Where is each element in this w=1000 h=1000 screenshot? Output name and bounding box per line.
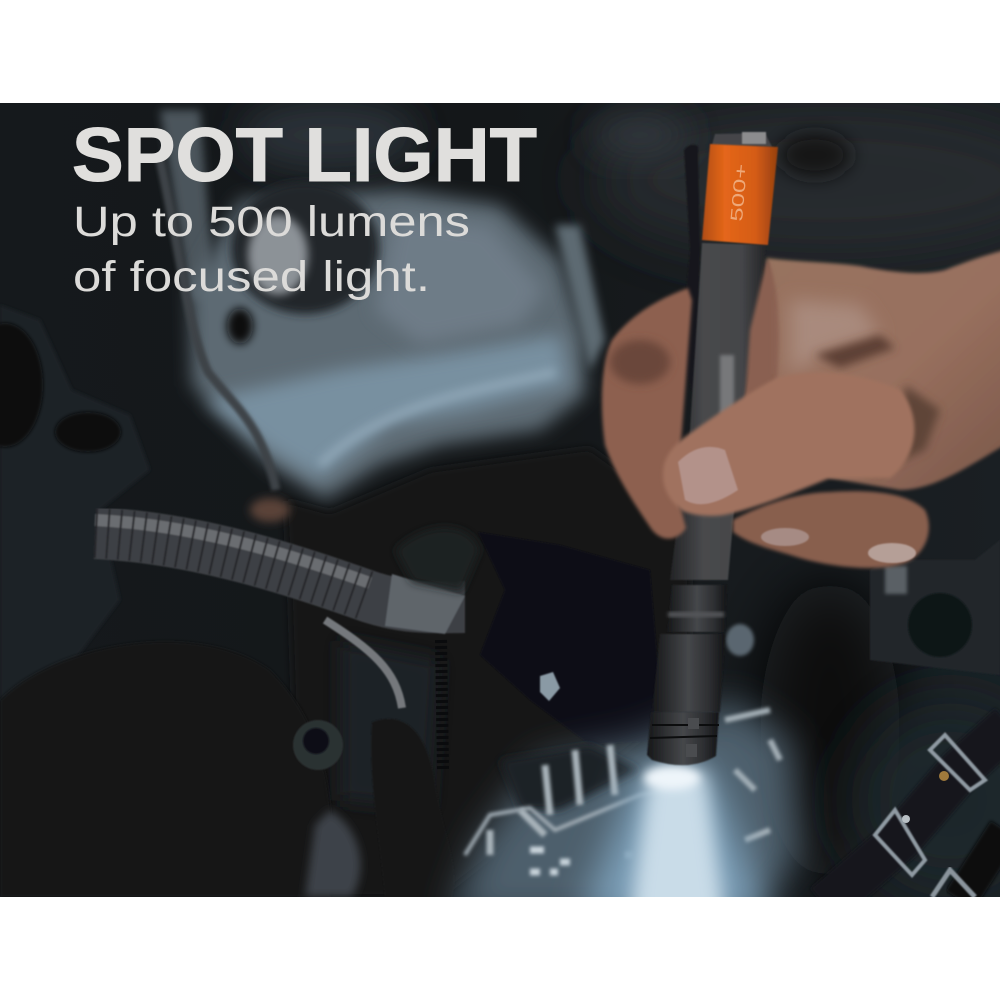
alternator, blurred and lit <box>450 700 800 920</box>
right-side hoses with metal clips <box>825 725 1000 905</box>
small pipe and bolt <box>292 616 449 808</box>
photo base dark background <box>0 103 1000 897</box>
infographic canvas <box>0 103 1000 897</box>
subtitle line 2: of focused light. <box>73 253 430 301</box>
corrugated wiring hose <box>95 520 465 634</box>
flashlight beam <box>580 766 770 920</box>
thumb <box>663 373 914 516</box>
knurled bezel <box>647 712 719 765</box>
500 mark on orange band: 500+ <box>727 163 751 222</box>
index finger <box>602 288 692 539</box>
tail cap <box>712 133 772 147</box>
engine cover, blurred grey-blue <box>160 110 605 500</box>
metal pipe down the cover <box>160 160 276 490</box>
grey barrel <box>670 243 766 580</box>
title: SPOT LIGHT <box>72 113 537 198</box>
back of hand <box>745 250 1000 490</box>
hand <box>602 250 1000 568</box>
lower bay dark area <box>301 461 688 584</box>
flashlight <box>647 132 778 765</box>
lower fingers <box>733 491 929 568</box>
neck <box>667 585 727 632</box>
wheel-shaped spot by the flashlight <box>726 624 754 656</box>
subtitle <box>73 198 470 301</box>
black plastic bracket under the hand <box>395 528 664 745</box>
subtitle line 1: Up to 500 lumens <box>73 198 470 246</box>
fingernail lower 1 <box>761 528 809 546</box>
head <box>652 634 725 712</box>
orange band <box>702 144 778 245</box>
dark blurred background shapes <box>240 99 1000 900</box>
pocket clip <box>684 144 700 276</box>
fingernail lower 2 <box>868 543 916 563</box>
thumbnail <box>678 447 738 504</box>
warm connector glow <box>250 498 290 522</box>
left black bracket and engine cover <box>0 305 440 897</box>
right-side connector <box>870 540 1000 675</box>
